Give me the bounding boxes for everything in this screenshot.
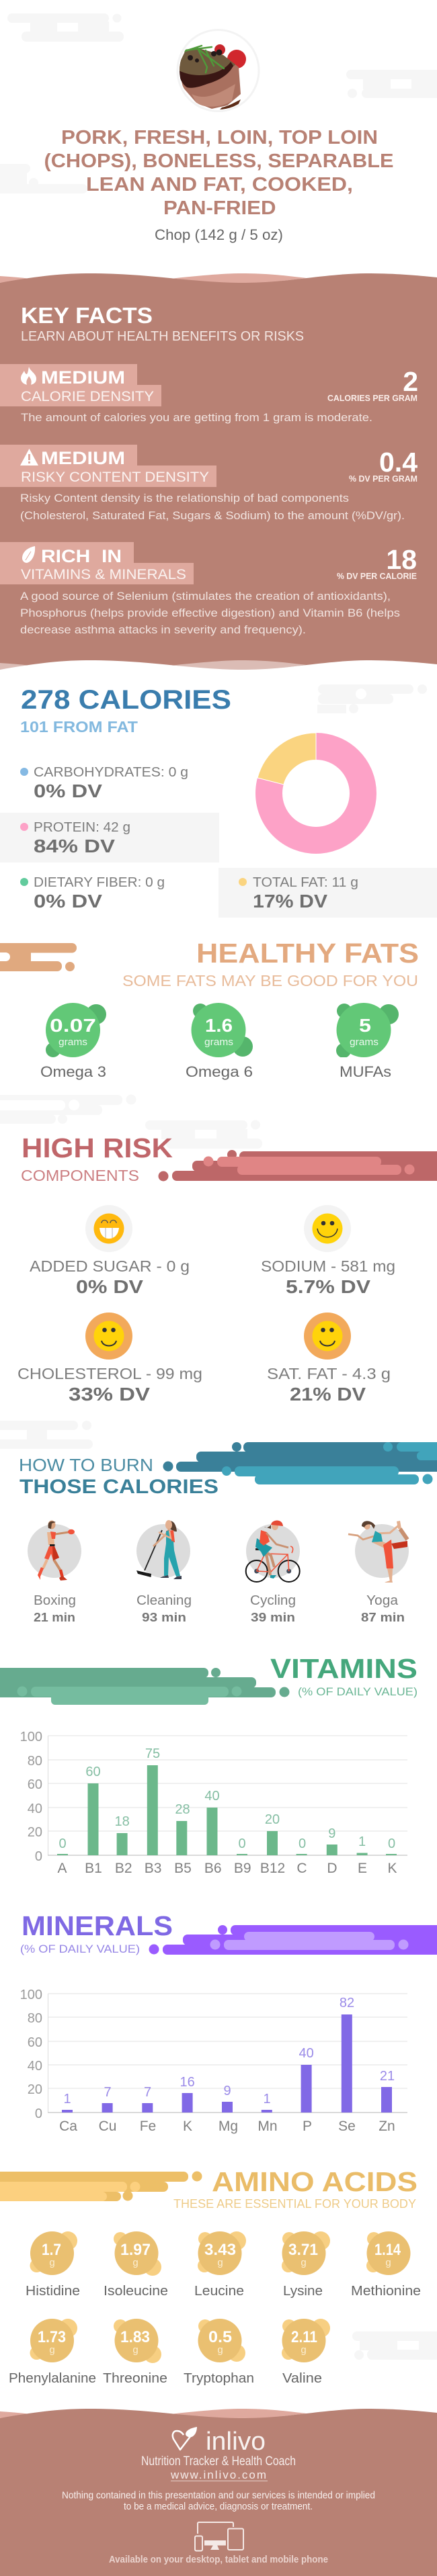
amino acid: tryptophan: Tryptophan — [184, 2371, 254, 2386]
heading: how to burn: HOW TO BURN — [19, 1455, 153, 1475]
amino acid: lysine: g — [301, 2257, 307, 2268]
title — [44, 127, 394, 219]
disclaimer: Nothing contained in this presentation and our services is intended or implied — [62, 2489, 375, 2501]
legend: dietary fiber: 0% DV — [34, 891, 102, 912]
stat: omega 6 — [186, 1003, 253, 1080]
amino acid: threonine: 1.83 — [120, 2328, 150, 2346]
legend: carbohydrates: 0% DV — [34, 781, 102, 801]
risk: cholesterol — [17, 1313, 202, 1405]
amino acid: histidine — [26, 2231, 80, 2299]
subheading: vitamins: (% OF DAILY VALUE) — [298, 1685, 418, 1698]
bar chart: vitamins: 100 — [20, 1730, 42, 1744]
risk: added sugar: ADDED SUGAR - 0 g — [30, 1257, 190, 1275]
heading: minerals: MINERALS — [22, 1910, 173, 1941]
bar chart: minerals: P — [303, 2119, 312, 2134]
bar chart: minerals: 16 — [180, 2075, 195, 2090]
stat: calories per gram — [327, 366, 418, 403]
subheading: healthy fats: SOME FATS MAY BE GOOD FOR YOU — [122, 972, 418, 989]
amino acid: lysine: Lysine — [283, 2284, 323, 2299]
amino acid: leucine — [194, 2231, 246, 2299]
vitamins banner cloud — [0, 1668, 289, 1705]
decorative cloud: burn left — [0, 1421, 93, 1449]
label: risky content density: MEDIUM — [41, 448, 125, 468]
disclaimer: to be a medical advice, diagnosis or treatment. — [124, 2501, 313, 2512]
icon: devices — [195, 2522, 243, 2551]
bar chart: vitamins: 28 — [175, 1802, 190, 1817]
legend: dietary fiber — [20, 875, 165, 912]
label: calorie density — [0, 364, 161, 406]
amino acid: threonine: Threonine — [103, 2371, 167, 2386]
decorative cloud: top right — [346, 70, 437, 98]
bar chart: minerals: Zn — [379, 2119, 395, 2134]
bar chart: vitamins: 0 — [238, 1836, 246, 1851]
bar chart: vitamins: B5 — [174, 1861, 192, 1876]
amino acid: valine: Valine — [282, 2371, 322, 2386]
stat: MUFAs — [336, 1003, 399, 1080]
amino acid: leucine: Leucine — [194, 2284, 244, 2299]
bar chart: vitamins: 0 — [58, 1836, 67, 1851]
legend: protein: 84% DV — [34, 836, 115, 856]
amino acid: methionine: 1.14 — [374, 2241, 401, 2259]
bar chart: vitamins: B1 — [85, 1861, 102, 1876]
donut chart: calorie sources — [257, 733, 363, 840]
bar chart: minerals: 7 — [104, 2085, 112, 2100]
subheading: minerals: (% OF DAILY VALUE) — [20, 1943, 140, 1955]
amino acid: isoleucine: Isoleucine — [104, 2284, 168, 2299]
legend: carbohydrates: CARBOHYDRATES: 0 g — [34, 765, 188, 780]
legend: protein — [0, 813, 219, 862]
decorative cloud: bottom right — [352, 2331, 437, 2360]
bar chart: minerals: 9 — [223, 2084, 231, 2098]
bar chart: minerals: 40 — [299, 2046, 314, 2061]
bar chart: vitamins: 75 — [145, 1746, 160, 1761]
stat: MUFAs: MUFAs — [340, 1063, 391, 1080]
title: LEAN AND FAT, COOKED, — [86, 174, 353, 195]
white wave closing key facts — [0, 660, 437, 686]
label: calorie density: CALORIE DENSITY — [21, 389, 154, 404]
stat: calories per gram: 2 — [403, 366, 418, 397]
bar chart: minerals — [20, 1988, 407, 2134]
activity: cleaning: Cleaning — [136, 1593, 192, 1608]
legend: dietary fiber: DIETARY FIBER: 0 g — [34, 875, 165, 890]
bar chart: minerals: 82 — [340, 1996, 354, 2010]
stat: percent DV per gram — [349, 447, 418, 484]
stat: percent DV per calorie — [337, 544, 417, 581]
amino acid: methionine — [351, 2231, 421, 2299]
stat: omega 6: 1.6 — [205, 1015, 233, 1036]
bar chart: minerals: 1 — [63, 2092, 71, 2106]
subheading: components: COMPONENTS — [21, 1167, 139, 1184]
logo wordmark: inlivo — [206, 2428, 266, 2456]
bar chart: vitamins: D — [327, 1861, 337, 1876]
bar chart: vitamins: 80 — [28, 1754, 42, 1769]
amino acid: valine — [282, 2319, 330, 2386]
subheading: LEARN ABOUT HEALTH BENEFITS OR RISKS — [21, 329, 304, 344]
stat: percent DV per gram: 0.4 — [379, 447, 418, 478]
bar chart: minerals: 100 — [20, 1988, 42, 2002]
amino acid: lysine — [282, 2231, 330, 2299]
stat: omega 6: Omega 6 — [186, 1063, 253, 1080]
heading: those calories: THOSE CALORIES — [19, 1476, 218, 1498]
amino acid: tryptophan — [184, 2319, 254, 2386]
text: rich in note: decrease asthma attacks in severity and frequency). — [20, 623, 306, 636]
risk: cholesterol: 33% DV — [69, 1384, 150, 1405]
amino acid: phenylalanine: 1.73 — [38, 2328, 66, 2346]
website: www.inlivo.com — [170, 2469, 266, 2481]
bar chart: vitamins: C — [296, 1861, 307, 1876]
amino acid: histidine: Histidine — [26, 2284, 80, 2299]
activity: cycling: Cycling — [250, 1593, 296, 1608]
heading: vitamins: VITAMINS — [270, 1653, 418, 1684]
bar chart: vitamins: 20 — [28, 1825, 42, 1840]
stat: omega 3: Omega 3 — [40, 1063, 106, 1080]
footer panel — [0, 2409, 437, 2576]
text: risky content note: Risky Content density is the relationship of bad components — [20, 492, 349, 504]
amino acid: leucine: g — [217, 2257, 223, 2268]
amino acid: phenylalanine: g — [49, 2344, 55, 2356]
label: calorie density: MEDIUM — [41, 367, 125, 388]
activity: cleaning: 93 min — [142, 1611, 186, 1624]
label: risky content density — [0, 445, 216, 487]
amino acid: threonine: g — [132, 2344, 138, 2356]
tagline: Nutrition Tracker & Health Coach — [141, 2454, 296, 2469]
bar chart: minerals: 1 — [263, 2092, 271, 2106]
bar chart: minerals: 7 — [144, 2085, 151, 2100]
bar chart: vitamins: K — [387, 1861, 397, 1876]
minerals banner cloud — [149, 1925, 437, 1955]
amino acid: phenylalanine — [9, 2319, 96, 2386]
stat: MUFAs: 5 — [359, 1015, 371, 1036]
stat: percent DV per gram: % DV PER GRAM — [349, 474, 418, 484]
burn banner cloud — [163, 1442, 437, 1484]
stat: percent DV per calorie: % DV PER CALORIE — [337, 572, 417, 581]
amino acid: tryptophan: g — [217, 2344, 223, 2356]
bar chart: minerals: Cu — [99, 2119, 116, 2134]
bar chart: minerals: Se — [338, 2119, 356, 2134]
text: rich in note: Phosphorus (helps provide effective digestion) and Vitamin B6 (helps — [20, 607, 400, 619]
bar chart: vitamins: E — [358, 1861, 367, 1876]
amino acid: methionine: Methionine — [351, 2284, 421, 2299]
amino acid: lysine: 3.71 — [288, 2241, 318, 2259]
text: rich in note: A good source of Selenium (stimulates the creation of antioxidants), — [20, 590, 391, 603]
high risk banner cloud — [159, 1150, 437, 1181]
activity: boxing: Boxing — [34, 1593, 76, 1608]
activity: boxing — [28, 1521, 81, 1624]
amino acid: threonine — [103, 2319, 167, 2386]
heading: amino acids: AMINO ACIDS — [212, 2166, 418, 2197]
disclaimer — [62, 2489, 375, 2512]
bar chart: minerals: 20 — [28, 2082, 42, 2097]
amino acid: valine: g — [301, 2344, 307, 2356]
bar chart: vitamins: 0 — [299, 1836, 306, 1851]
label: rich in vitamins and minerals: VITAMINS & MINERALS — [21, 567, 186, 582]
bar chart: vitamins: B12 — [260, 1861, 285, 1876]
food photo: pork steak in a circle — [177, 30, 259, 112]
label: rich in vitamins and minerals — [0, 542, 194, 584]
title: PAN-FRIED — [163, 197, 276, 219]
bar chart: minerals: K — [183, 2119, 192, 2134]
risk: saturated fat: 21% DV — [290, 1384, 366, 1405]
logo: inlivo heart — [173, 2427, 197, 2450]
risk: saturated fat — [267, 1313, 391, 1405]
bar chart: vitamins: 60 — [85, 1765, 101, 1779]
healthy fats banner cloud — [0, 943, 77, 971]
label: risky content density: RISKY CONTENT DENSITY — [21, 470, 209, 485]
bar chart: minerals: Mg — [218, 2119, 238, 2134]
stat: percent DV per calorie: 18 — [386, 544, 417, 575]
decorative cloud: high risk centre — [145, 1120, 262, 1149]
amino acid: histidine: 1.7 — [42, 2241, 61, 2259]
label: rich in vitamins and minerals: RICH IN — [41, 546, 122, 566]
activity: cycling — [246, 1521, 300, 1624]
stat: omega 6: grams — [204, 1036, 233, 1048]
bar chart: minerals: Ca — [59, 2119, 77, 2134]
decorative cloud: high risk left — [0, 1095, 136, 1124]
legend: total fat — [218, 868, 437, 918]
text: risky content note — [20, 492, 405, 522]
amino acid: tryptophan: 0.5 — [208, 2328, 232, 2346]
amino acid: valine: 2.11 — [291, 2328, 317, 2346]
activity: yoga: 87 min — [361, 1611, 405, 1624]
bar chart: vitamins: B9 — [234, 1861, 251, 1876]
amino acid: leucine: 3.43 — [204, 2241, 236, 2259]
subheading: amino acids: THESE ARE ESSENTIAL FOR YOUR BODY — [173, 2197, 416, 2211]
stat: calories per gram: CALORIES PER GRAM — [327, 394, 418, 403]
title: PORK, FRESH, LOIN, TOP LOIN — [61, 127, 378, 148]
bar chart: vitamins: 9 — [328, 1826, 335, 1841]
legend: total fat: 17% DV — [253, 891, 327, 912]
heading: high risk: HIGH RISK — [22, 1132, 173, 1163]
legend: protein: PROTEIN: 42 g — [34, 820, 130, 835]
bar chart: minerals: Mn — [257, 2119, 278, 2134]
stat: omega 3: grams — [58, 1036, 87, 1048]
bar chart: vitamins: B2 — [115, 1861, 132, 1876]
title: (CHOPS), BONELESS, SEPARABLE — [44, 150, 394, 172]
activity: yoga — [348, 1521, 409, 1624]
text: risky content note: (Cholesterol, Saturated Fat, Sugars & Sodium) to the amount (%DV/gr). — [20, 509, 405, 522]
amino acid: phenylalanine: Phenylalanine — [9, 2371, 96, 2386]
stat: MUFAs: grams — [350, 1036, 379, 1048]
bar chart: vitamins: 40 — [28, 1802, 42, 1816]
amino acid: histidine: g — [49, 2257, 55, 2268]
bar chart: vitamins: 60 — [28, 1777, 42, 1792]
bar chart: vitamins: 20 — [265, 1812, 280, 1827]
bar chart: vitamins: B6 — [204, 1861, 222, 1876]
risk: saturated fat: SAT. FAT - 4.3 g — [267, 1365, 391, 1382]
risk: sodium: 5.7% DV — [286, 1276, 370, 1297]
text: rich in note — [20, 590, 400, 636]
bar chart: minerals: 40 — [28, 2059, 42, 2074]
stat: omega 3 — [40, 1003, 106, 1080]
availability note: Available on your desktop, tablet and mobile phone — [109, 2554, 328, 2565]
amino acid: isoleucine: g — [132, 2257, 138, 2268]
bar chart: minerals: 80 — [28, 2011, 42, 2026]
bar chart: minerals: Fe — [140, 2119, 156, 2134]
amino acid: isoleucine: 1.97 — [120, 2241, 151, 2259]
bar chart: vitamins: A — [57, 1861, 67, 1876]
activity: cleaning — [136, 1520, 192, 1624]
legend: total fat: TOTAL FAT: 11 g — [253, 875, 358, 890]
amino acid: isoleucine — [104, 2231, 168, 2299]
bar chart: minerals: 21 — [380, 2069, 395, 2084]
stat: omega 3: 0.07 — [50, 1015, 96, 1036]
activity: yoga: Yoga — [366, 1593, 399, 1608]
decorative cloud: top left — [7, 13, 124, 42]
heading: healthy fats: HEALTHY FATS — [196, 938, 419, 969]
legend: carbohydrates — [20, 765, 188, 801]
amino acid: methionine: g — [385, 2257, 391, 2268]
bar chart: minerals: 60 — [28, 2035, 42, 2050]
bar chart: vitamins: 0 — [388, 1836, 395, 1851]
risk: added sugar: 0% DV — [76, 1276, 143, 1297]
text: calorie density note: The amount of calories you are getting from 1 gram is moderate. — [21, 411, 372, 424]
heading: calories: 278 CALORIES — [21, 685, 231, 715]
activity: boxing: 21 min — [34, 1611, 75, 1624]
heading: key facts: KEY FACTS — [21, 303, 153, 328]
bar chart: vitamins: 40 — [204, 1789, 220, 1804]
bar chart: vitamins: 1 — [358, 1834, 366, 1849]
bar chart: vitamins: 18 — [114, 1814, 130, 1829]
amino acids banner cloud — [0, 2171, 202, 2201]
serving size: Chop (142 g / 5 oz) — [155, 226, 283, 243]
risk: sodium — [261, 1205, 395, 1297]
risk: sodium: SODIUM - 581 mg — [261, 1257, 395, 1275]
decorative cloud: left of title — [0, 164, 87, 193]
bar chart: vitamins: 0 — [35, 1849, 42, 1864]
risk: cholesterol: CHOLESTEROL - 99 mg — [17, 1365, 202, 1382]
bar chart: vitamins: B3 — [145, 1861, 161, 1876]
decorative cloud: calories — [317, 684, 427, 713]
activity: cycling: 39 min — [251, 1611, 295, 1624]
bar chart: vitamins — [20, 1730, 407, 1876]
panel: key facts — [0, 273, 437, 678]
risk: added sugar — [30, 1205, 190, 1297]
bar chart: minerals: 0 — [35, 2106, 42, 2121]
subheading: calories from fat: 101 FROM FAT — [20, 718, 138, 736]
